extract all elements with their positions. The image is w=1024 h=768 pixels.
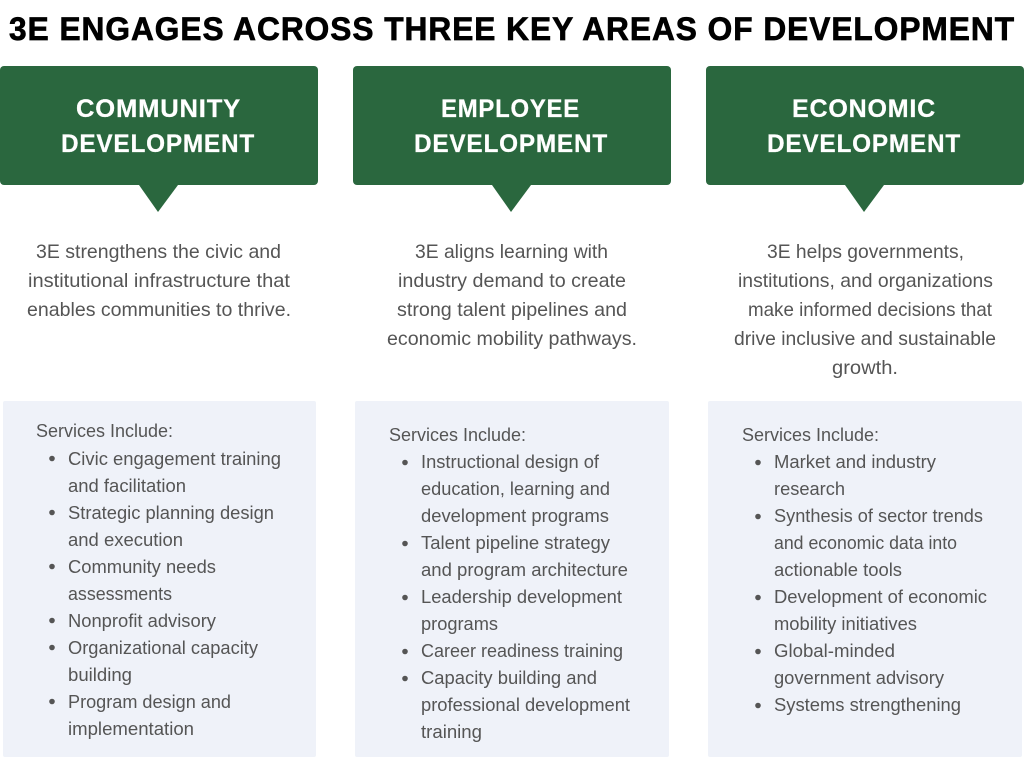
services card: employee development: Leadership development: [421, 586, 623, 607]
banner: community development: DEVELOPMENT: [61, 130, 255, 158]
services card: economic development: and economic data into: [774, 532, 957, 553]
banner: employee development: DEVELOPMENT: [414, 130, 608, 158]
services card: community development: Nonprofit advisory: [68, 610, 217, 631]
services card: community development: Program design and: [68, 691, 231, 712]
description: community development: enables communities to thrive.: [27, 299, 291, 321]
services card: community development: implementation: [68, 718, 194, 739]
services card: employee development: and program architecture: [421, 559, 628, 580]
banner: employee development: EMPLOYEE: [441, 95, 580, 123]
services card: economic development: Market and industry: [774, 451, 937, 472]
services card: employee development: programs: [421, 613, 498, 634]
services card: economic development: Development of economic: [774, 586, 987, 607]
description: economic development: 3E helps governments,: [767, 241, 964, 263]
description: employee development: 3E aligns learning with: [415, 241, 608, 263]
description: community development: [27, 241, 291, 321]
panel: community development: [0, 66, 318, 757]
panel: economic development: [706, 66, 1024, 757]
services card: community development: Strategic planning design: [68, 502, 274, 523]
description: community development: 3E strengthens the civic and: [36, 241, 281, 263]
description: economic development: growth.: [832, 357, 898, 379]
description: economic development: institutions, and organizations: [738, 270, 993, 292]
services card: economic development: mobility initiatives: [774, 613, 917, 634]
banner: economic development: [706, 66, 1024, 212]
services card: community development: Civic engagement training: [68, 448, 281, 469]
services card: employee development: Career readiness training: [421, 640, 623, 661]
services card: employee development: education, learning and: [421, 478, 610, 499]
description: employee development: industry demand to create: [398, 270, 626, 292]
services card: community development: Organizational capacity: [68, 637, 259, 658]
description: employee development: economic mobility pathways.: [387, 328, 637, 350]
services card: employee development: Talent pipeline strategy: [421, 532, 611, 553]
services card: employee development: professional development: [421, 694, 631, 715]
services card: employee development: training: [421, 721, 482, 742]
services card: employee development: development programs: [421, 505, 609, 526]
services card: economic development: Systems strengthening: [774, 694, 961, 715]
panel: employee development: [353, 66, 671, 757]
description: employee development: strong talent pipelines and: [397, 299, 627, 321]
description: economic development: make informed decisions that: [748, 299, 993, 321]
services card: economic development: government advisory: [774, 667, 945, 688]
description: community development: institutional infrastructure that: [28, 270, 291, 292]
title: 3E ENGAGES ACROSS THREE KEY AREAS OF DEVELOPMENT: [9, 11, 1015, 47]
description: employee development: [387, 241, 637, 350]
banner: employee development: [353, 66, 671, 212]
services card: community development: and execution: [68, 529, 183, 550]
services card: community development: and facilitation: [68, 475, 186, 496]
description: economic development: drive inclusive and sustainable: [734, 328, 996, 350]
banner: economic development: DEVELOPMENT: [767, 130, 961, 158]
banner: economic development: ECONOMIC: [792, 95, 936, 123]
services card: economic development: actionable tools: [774, 559, 902, 580]
services card: community development: building: [68, 664, 132, 685]
banner: community development: COMMUNITY: [76, 95, 241, 123]
services card: economic development: research: [774, 478, 845, 499]
banner: community development: [0, 66, 318, 212]
services card: employee development: [355, 401, 669, 757]
services card: community development: assessments: [68, 583, 172, 604]
services card: employee development: Services Include:: [389, 424, 526, 445]
services card: economic development: Services Include:: [742, 424, 879, 445]
description: economic development: [734, 241, 996, 379]
services card: employee development: Capacity building and: [421, 667, 597, 688]
services card: economic development: Synthesis of sector trends: [774, 505, 983, 526]
services card: economic development: [708, 401, 1022, 757]
services card: employee development: Instructional design of: [421, 451, 600, 472]
services card: economic development: Global-minded: [774, 640, 895, 661]
services card: community development: Services Include:: [36, 420, 173, 441]
services card: community development: Community needs: [68, 556, 216, 577]
services card: community development: [3, 401, 316, 757]
